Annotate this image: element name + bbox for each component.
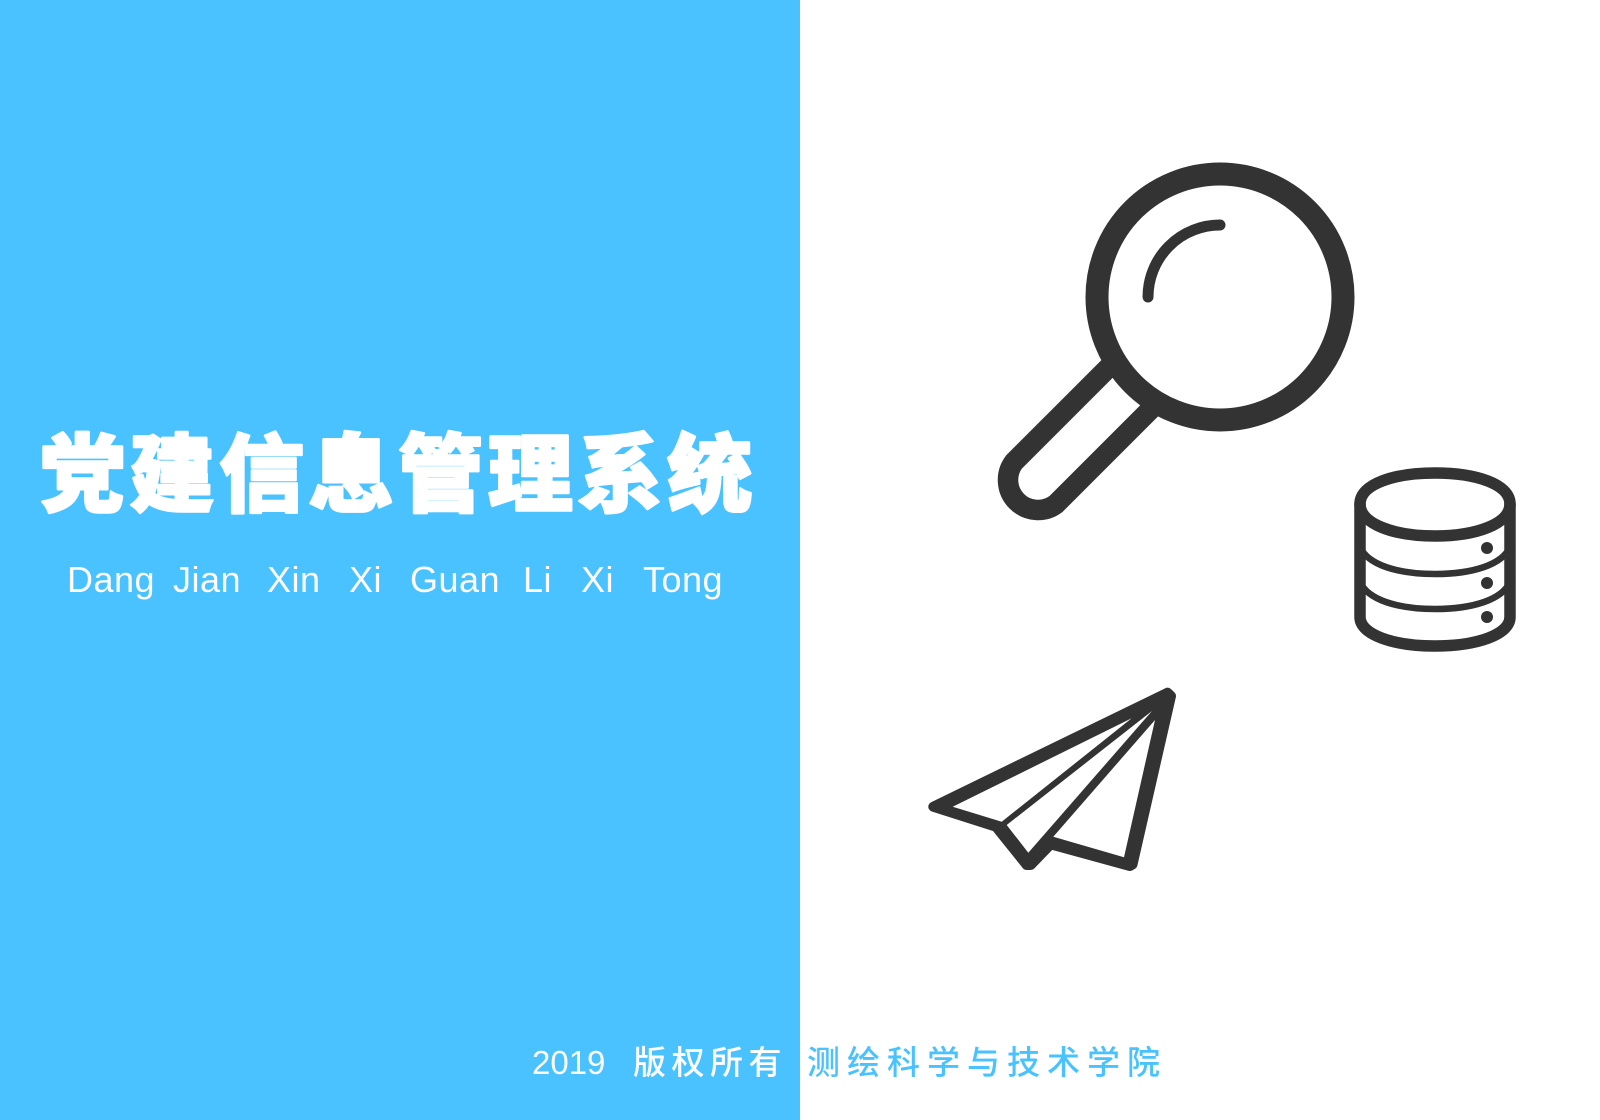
icon: magnifying glass (1008, 174, 1343, 510)
lens highlight (1148, 225, 1220, 297)
footer: copyright: 版权所有 (633, 1044, 787, 1081)
database body (1360, 504, 1510, 646)
magnifier handle (1008, 356, 1162, 510)
subtitle: pinyin: Guan (410, 559, 500, 600)
plane wing fold right (1053, 720, 1155, 857)
magnifier lens (1097, 174, 1343, 420)
footer: copyright: 2019 (532, 1044, 605, 1081)
subtitle: pinyin: Tong (643, 559, 723, 600)
database top ellipse (1360, 473, 1510, 536)
subtitle: pinyin: Xi (581, 559, 614, 600)
plane wing fold centre (1007, 711, 1152, 853)
subtitle: pinyin: Xi (349, 559, 382, 600)
subtitle: pinyin: Li (523, 559, 552, 600)
subtitle: pinyin: Dang (67, 559, 155, 600)
icon: paper plane (933, 693, 1171, 866)
footer: institution: 测绘科学与技术学院 (807, 1044, 1167, 1081)
panel: blue left background (0, 0, 800, 1120)
icon: database (1360, 473, 1510, 646)
database tier lines (1360, 547, 1510, 609)
subtitle: pinyin: Jian (173, 559, 241, 600)
plane silhouette (933, 693, 1171, 866)
title: 党建信息管理系统 (40, 429, 757, 524)
subtitle: pinyin: Xin (267, 559, 321, 600)
plane wing fold left (953, 718, 1132, 822)
database indicator dots (1481, 542, 1493, 623)
